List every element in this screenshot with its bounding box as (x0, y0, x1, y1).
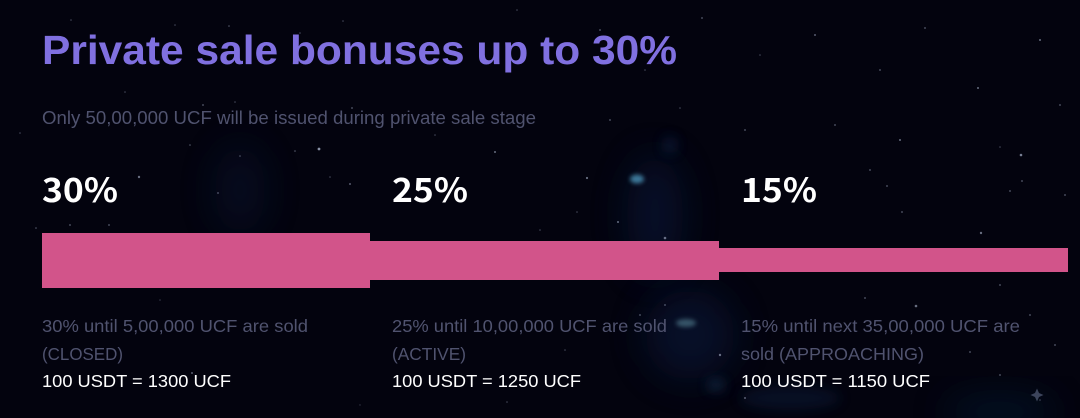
subtitle: Only 50,00,000 UCF will be issued during private sale stage (42, 108, 536, 128)
tier 3 description: sold (APPROACHING) (741, 344, 924, 364)
tier 2 description: (ACTIVE) (392, 344, 466, 364)
tier 2 description: 25% until 10,00,000 UCF are sold (392, 316, 667, 336)
tier 3 description (741, 316, 1020, 391)
bar segment: 15% tier (719, 248, 1068, 272)
tier 1 description: 100 USDT = 1300 UCF (42, 371, 231, 391)
title: Private sale bonuses up to 30% (42, 27, 677, 73)
tier 1 description (42, 316, 308, 391)
tier 1: 30% percentage: 30% (42, 164, 118, 212)
tier 1 description: 30% until 5,00,000 UCF are sold (42, 316, 308, 336)
tier 2: 25% percentage: 25% (392, 164, 468, 212)
tier 1 description: (CLOSED) (42, 344, 123, 364)
tier 3: 15% percentage: 15% (741, 164, 817, 212)
bar segment: 30% tier (42, 233, 370, 288)
tier 2 description (392, 316, 667, 391)
bar: tiered bonus levels (42, 233, 1068, 288)
tier 2 description: 100 USDT = 1250 UCF (392, 371, 581, 391)
bar segment: 25% tier (370, 241, 719, 280)
tier 3 description: 100 USDT = 1150 UCF (741, 371, 930, 391)
tier 3 description: 15% until next 35,00,000 UCF are (741, 316, 1020, 336)
